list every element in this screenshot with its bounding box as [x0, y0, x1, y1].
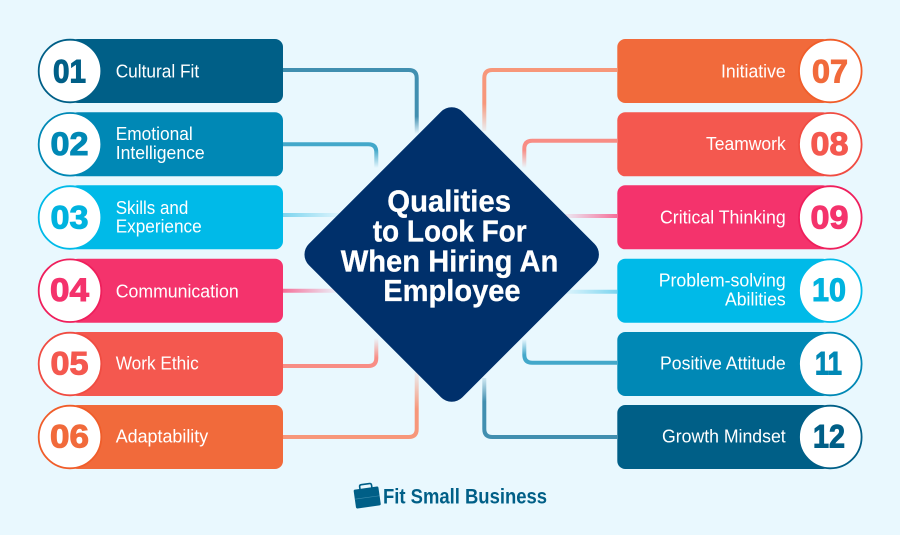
item 10: Problem-solving Abilities: 10 — [812, 272, 846, 308]
logo: Fit Small Business — [353, 482, 547, 509]
logo: Fit Small Business: Fit Small Business — [383, 486, 547, 508]
item 09: Critical Thinking: 09 — [810, 199, 848, 235]
item 03: Skills and Experience: 03 — [50, 199, 88, 235]
title: to Look For — [373, 214, 527, 249]
item 09: Critical Thinking: Critical Thinking — [660, 207, 786, 227]
item 11: Positive Attitude: 11 — [815, 345, 842, 381]
item 09: Critical Thinking — [617, 185, 862, 249]
item 03: Skills and Experience: Experience — [116, 217, 202, 237]
item 05: Work Ethic: Work Ethic — [116, 353, 199, 373]
icon: briefcase — [353, 482, 381, 509]
item 03: Skills and Experience — [39, 185, 283, 249]
item 06: Adaptability — [39, 405, 283, 469]
item 10: Problem-solving Abilities — [617, 259, 862, 323]
item 03: Skills and Experience: Skills and — [116, 198, 188, 218]
item 02: Emotional Intelligence: Emotional — [116, 124, 193, 144]
item 05: Work Ethic: 05 — [50, 345, 88, 381]
connector lines — [283, 70, 617, 437]
item 04: Communication — [39, 259, 283, 323]
item 01: Cultural Fit: Cultural Fit — [116, 62, 199, 82]
item 12: Growth Mindset — [617, 405, 862, 469]
title: Qualities — [387, 184, 511, 219]
item 11: Positive Attitude — [617, 332, 862, 396]
item 02: Emotional Intelligence — [39, 112, 283, 176]
item 12: Growth Mindset: 12 — [813, 419, 845, 455]
title: When Hiring An — [341, 244, 558, 279]
item 02: Emotional Intelligence: Intelligence — [116, 143, 205, 163]
central diamond with title — [298, 101, 605, 408]
title: Employee — [383, 273, 521, 308]
item 10: Problem-solving Abilities: Problem-solving — [659, 271, 786, 291]
item 02: Emotional Intelligence: 02 — [50, 126, 88, 162]
item 07: Initiative — [617, 39, 862, 103]
item 11: Positive Attitude: Positive Attitude — [660, 353, 786, 373]
item 07: Initiative: 07 — [812, 53, 848, 89]
item 08: Teamwork: 08 — [810, 126, 848, 162]
item 10: Problem-solving Abilities: Abilities — [725, 290, 786, 310]
item 06: Adaptability: 06 — [50, 419, 89, 455]
item 04: Communication: Communication — [116, 282, 239, 302]
item 06: Adaptability: Adaptability — [116, 426, 208, 446]
item 05: Work Ethic — [39, 332, 283, 396]
item 07: Initiative: Initiative — [721, 62, 786, 82]
title — [341, 184, 558, 308]
item 08: Teamwork: Teamwork — [706, 134, 787, 154]
item 08: Teamwork — [617, 112, 862, 176]
item 01: Cultural Fit: 01 — [53, 54, 86, 90]
item 01: Cultural Fit — [39, 39, 283, 103]
item 12: Growth Mindset: Growth Mindset — [662, 426, 786, 446]
item 04: Communication: 04 — [50, 272, 89, 308]
